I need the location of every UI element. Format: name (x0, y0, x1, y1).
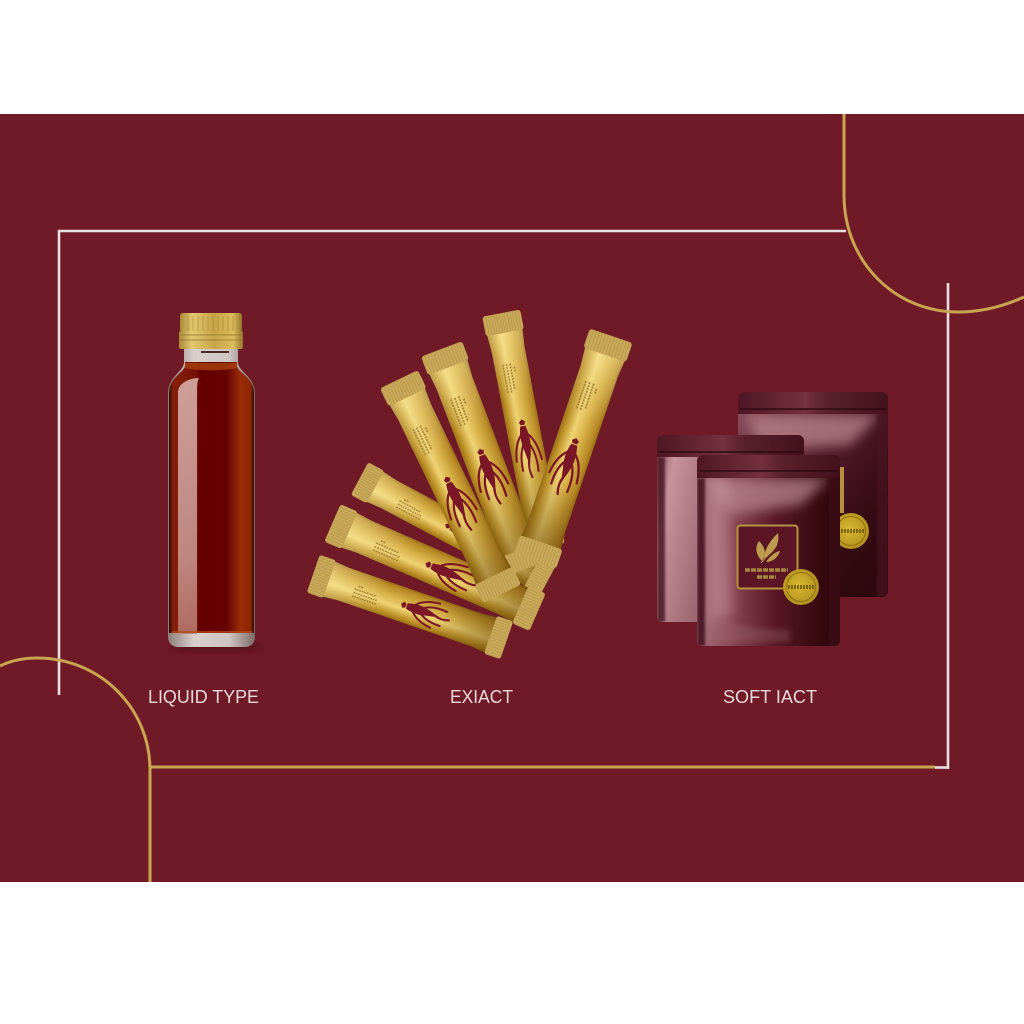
bottle liquid (169, 362, 254, 633)
pouch sheen bottom (719, 624, 792, 644)
left pouch (657, 435, 804, 622)
product: fan of gold stick packs (307, 309, 633, 659)
liquid bottom band (172, 631, 252, 633)
bottle glass base (168, 349, 255, 647)
stick pack upper back (482, 309, 565, 551)
gold arc bottom left (0, 658, 150, 882)
label small print marks (745, 570, 788, 577)
product label: liquid type: LIQUID TYPE (148, 686, 259, 707)
liquid surface band (185, 363, 237, 370)
stick pack third (421, 341, 546, 577)
background panel (0, 114, 1024, 882)
product: liquid bottle (168, 313, 262, 652)
gold frame line (150, 766, 935, 768)
stick pack lower middle (324, 504, 546, 631)
stick pack bottom (307, 555, 513, 659)
pouch sheen top (705, 478, 830, 515)
back pouch (738, 392, 888, 597)
front pouch gold seal (783, 569, 819, 605)
infographic canvas (0, 114, 1024, 882)
product label: exiact: EXIACT (450, 686, 513, 707)
pouch sheen left (707, 480, 733, 622)
back pouch gold seal (833, 513, 869, 549)
front pouch label (738, 526, 798, 588)
white frame lines (58, 230, 948, 769)
stick pack right (513, 329, 633, 568)
front pouch (697, 455, 840, 646)
stick pack lower back (351, 462, 557, 596)
bottle cap (179, 313, 243, 349)
product label: soft iact: SOFT IACT (723, 686, 817, 707)
gold arc top right (844, 114, 1024, 312)
bottle highlight (178, 378, 199, 634)
leaf icon (756, 533, 780, 563)
product: burgundy pouches (657, 392, 888, 646)
stick pack front centre (380, 370, 521, 603)
bottle neck band (201, 351, 229, 353)
bottle shadow (170, 642, 262, 652)
